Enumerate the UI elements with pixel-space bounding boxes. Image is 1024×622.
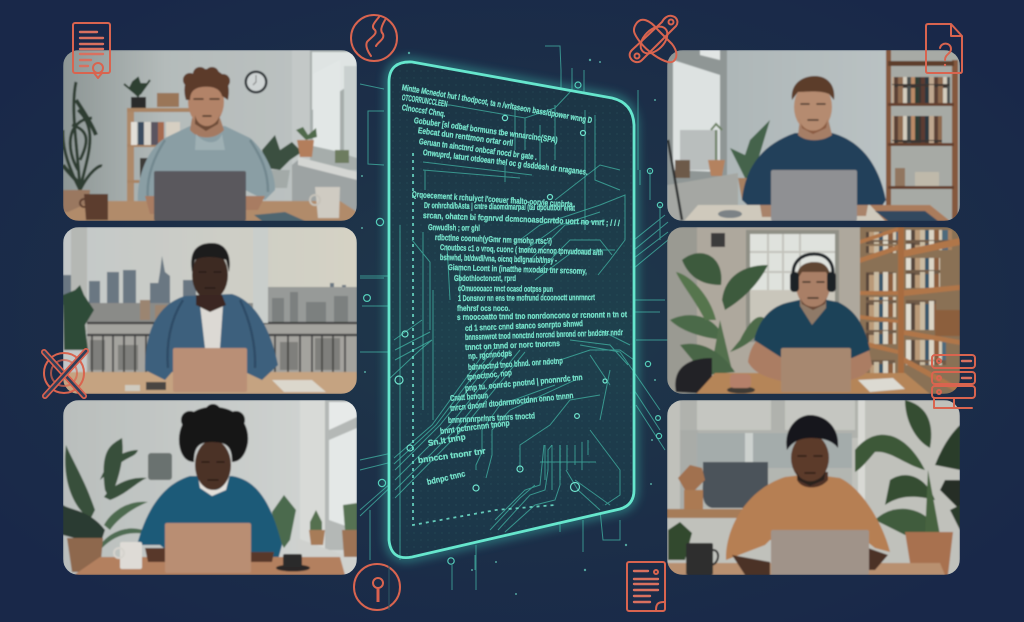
table	[684, 205, 950, 221]
code text lines: s rnoocoatto tnnd tno nonrdoncono or rcnonnt n tn ot	[457, 309, 627, 322]
code text lines: cOmuoooacc nnct ocasd ootpss pun	[458, 283, 553, 294]
icon: crossed out circle	[44, 351, 86, 396]
laptop	[173, 348, 247, 392]
scattered sparkle dots	[361, 52, 656, 595]
table	[63, 201, 357, 221]
large plant	[63, 438, 152, 548]
code text lines: OTCORRUNCCLEEN	[401, 92, 448, 109]
arms	[748, 330, 872, 382]
table	[63, 372, 357, 394]
code text lines: Eebcat dun renttmon ortar orll	[417, 125, 514, 148]
dried flower vase	[678, 465, 705, 511]
table	[667, 563, 945, 575]
hands	[760, 205, 868, 217]
plant pot	[905, 532, 953, 575]
code text lines: bnnt pctnrcnnn tnonp	[439, 418, 510, 436]
code text lines: Giamcn Lcont in (inatthe mxodatr tnr srcsomy,	[448, 262, 587, 276]
icon: broken circle with keyhole	[354, 564, 400, 610]
person neck	[797, 472, 828, 488]
code text lines: bnnccn tnonr tnr	[417, 445, 487, 465]
left tall plant	[63, 82, 102, 190]
person head	[791, 434, 829, 482]
code text lines: srcan, ohatcn bi fcgnrvd dcmcnoasdcrrtdo uort no vnrt ; / / /	[423, 210, 621, 228]
code text lines: Cnoutbcs c1 o vroq, cuonc ( tnonto mcnop tpnvudoaud a/th	[440, 242, 603, 257]
person torso	[726, 474, 890, 560]
laptop	[154, 171, 246, 221]
mug right	[310, 187, 340, 218]
icon: wrench and atom	[630, 16, 677, 62]
person shirt	[754, 297, 870, 358]
circuit traces outside the panel	[360, 46, 668, 590]
panel glow	[389, 62, 634, 558]
code text lines: bnnrnnnrpr/nrs tnnrs tnoctd	[448, 410, 535, 425]
person t-shirt	[200, 305, 223, 348]
code text lines: Sn.lt tnnp	[427, 431, 466, 448]
window plants	[272, 495, 357, 557]
notebook	[254, 212, 305, 221]
forearms	[145, 548, 274, 562]
code text lines: Clnoccsf Chnq.	[401, 102, 446, 119]
white mug	[114, 542, 142, 569]
window pillars	[71, 227, 268, 332]
person neck	[800, 296, 826, 325]
left plant pot	[63, 190, 90, 212]
person head	[796, 262, 830, 308]
phone and paper	[125, 380, 326, 392]
panel: developer 2, denim shirt	[63, 227, 357, 394]
large plant	[670, 253, 768, 375]
notebook	[858, 378, 905, 392]
shelf	[127, 93, 191, 208]
panel: holographic code screen	[388, 62, 634, 560]
icon: broken circle	[351, 15, 397, 61]
code text lines: bshwhd, bt/dwdl/vna, oicnq bdlgnaub/t/nsy -	[440, 252, 557, 265]
code text lines: tpnoctnoc, nop	[466, 367, 512, 382]
sofa	[703, 462, 768, 508]
clock	[244, 70, 268, 94]
plant pot	[67, 538, 103, 572]
code text lines: tnnct on tnnd or norc tnorcns	[465, 338, 560, 352]
code text lines: Cnatt bcnoun	[450, 390, 488, 403]
panel circuit nodes	[395, 115, 607, 492]
code text lines: Qrqoecement k rchuiyct I'coeuer fhalto-ooryle cunbrta	[412, 189, 573, 209]
icon: certificate document	[73, 23, 110, 78]
window sill	[668, 173, 738, 221]
code text lines: bdnnoctnd tnco bhnd. onr ndotnp	[468, 355, 563, 372]
code text lines: Dr onhrchd/bAsta | cntre dlaomdmarpal (tal dpouttoor ehat	[424, 200, 575, 213]
person head	[187, 86, 225, 126]
code text lines: pnp tu. oonrdc pnotnd | pnonnrdc tnn	[465, 372, 583, 393]
person neck	[798, 118, 832, 140]
person collar	[198, 474, 230, 496]
code text lines: Geruan tn alnctnrd onbcaf nocd br gate .	[418, 136, 538, 162]
bookcase	[860, 227, 960, 394]
person afro	[179, 404, 248, 462]
code text lines: 1 Donsnor nn ens tne mofrund dcoonoctt unnrnncrt	[458, 292, 595, 303]
code text lines: tnrcn dnonr/ dtodnrnnoctdnn onno tnnnn	[449, 390, 574, 413]
panel: developer 1, grey sweater	[63, 50, 357, 221]
panel: developer 4, navy sweater	[667, 50, 960, 221]
code text lines: Onwuprd, Iaturt otdoean thel oc g dsddosh dr nraganes.	[422, 147, 588, 177]
code text lines: rdbctlne coonuh(yGmr nm gmohp rtsc'i)	[435, 232, 552, 246]
large plant	[855, 400, 960, 535]
circuit traces inside the panel	[388, 90, 634, 560]
window	[746, 230, 839, 342]
code text lines: fhehrsf ocs noco.	[457, 303, 510, 313]
dark mug	[686, 543, 718, 575]
panel: developer 5, headphones and bookcase	[667, 227, 960, 394]
person head	[794, 82, 832, 132]
laptop	[771, 530, 869, 575]
wall frame	[711, 233, 725, 247]
panel dot grid	[389, 62, 634, 558]
icon: document with text lines	[627, 562, 665, 611]
coffee cup	[727, 374, 755, 394]
code text lines: bnnssnwrot tnod nonctnd norcnd bnrond onr bndcntr nndr	[465, 327, 624, 342]
code text lines: np. rgcnnodps	[468, 348, 512, 361]
window sill	[301, 540, 328, 550]
glasses and notebook on desk	[718, 210, 938, 221]
outer trace nodes	[364, 82, 663, 564]
icon: document with question mark	[926, 24, 962, 73]
hands	[145, 196, 265, 214]
panel: developer 6, orange sweater	[667, 400, 960, 575]
window with blinds	[680, 400, 865, 510]
window	[310, 50, 357, 170]
pot shadow	[675, 358, 712, 394]
person hair	[786, 415, 838, 450]
buildings below railing	[87, 322, 357, 372]
panel: developer 3, teal sweater and afro	[63, 400, 357, 575]
forearms	[732, 548, 888, 575]
person head	[195, 440, 231, 490]
dotted frame lines	[413, 153, 555, 525]
panel bright border	[389, 62, 634, 558]
bookcase	[886, 50, 960, 221]
code text lines: cd 1 snorc cnnd stanco sonrpto shnwd	[465, 318, 583, 333]
code text lines	[401, 82, 627, 487]
city lower band	[87, 303, 253, 322]
laptop	[165, 523, 251, 573]
window plants	[262, 127, 349, 188]
railing	[87, 323, 357, 372]
panel glass fill	[389, 62, 634, 558]
black cup and saucer	[276, 554, 310, 572]
person hair	[183, 67, 230, 100]
window sill	[667, 509, 747, 518]
window sill	[292, 160, 357, 212]
laptop	[771, 170, 857, 221]
easel leg	[668, 140, 682, 220]
person torso	[137, 476, 282, 560]
person head	[191, 256, 229, 296]
person torso	[742, 133, 886, 212]
person torso	[138, 126, 275, 208]
window	[300, 400, 357, 550]
icon: server stack	[932, 355, 975, 408]
headphones	[793, 254, 833, 280]
table	[696, 373, 930, 394]
code text lines: Gbdothloctoncnt, rprd	[454, 273, 516, 283]
laptop	[781, 348, 851, 392]
code text lines: Gobuber [sl odbaf bormuns tbe wnnarclnc(SPA)	[413, 115, 558, 145]
person neck	[190, 118, 224, 138]
person torso	[145, 294, 278, 380]
wall art	[148, 453, 172, 480]
window	[667, 50, 727, 185]
table	[74, 557, 345, 575]
mug left	[80, 194, 108, 220]
code text lines: Mintte Mcnedot hut I thodpcot, ta n /vrltaseon bass/dpower wnng D	[401, 82, 593, 125]
shelf plant	[124, 78, 150, 108]
plant pots	[675, 120, 770, 200]
code text lines: bdnpc tnnc	[426, 468, 466, 487]
person hair	[792, 76, 834, 100]
code text lines: Gnwudlsh ; orr ghl	[428, 222, 480, 233]
lower small plant	[668, 522, 692, 560]
plant	[63, 285, 94, 350]
city skyline	[63, 256, 347, 304]
